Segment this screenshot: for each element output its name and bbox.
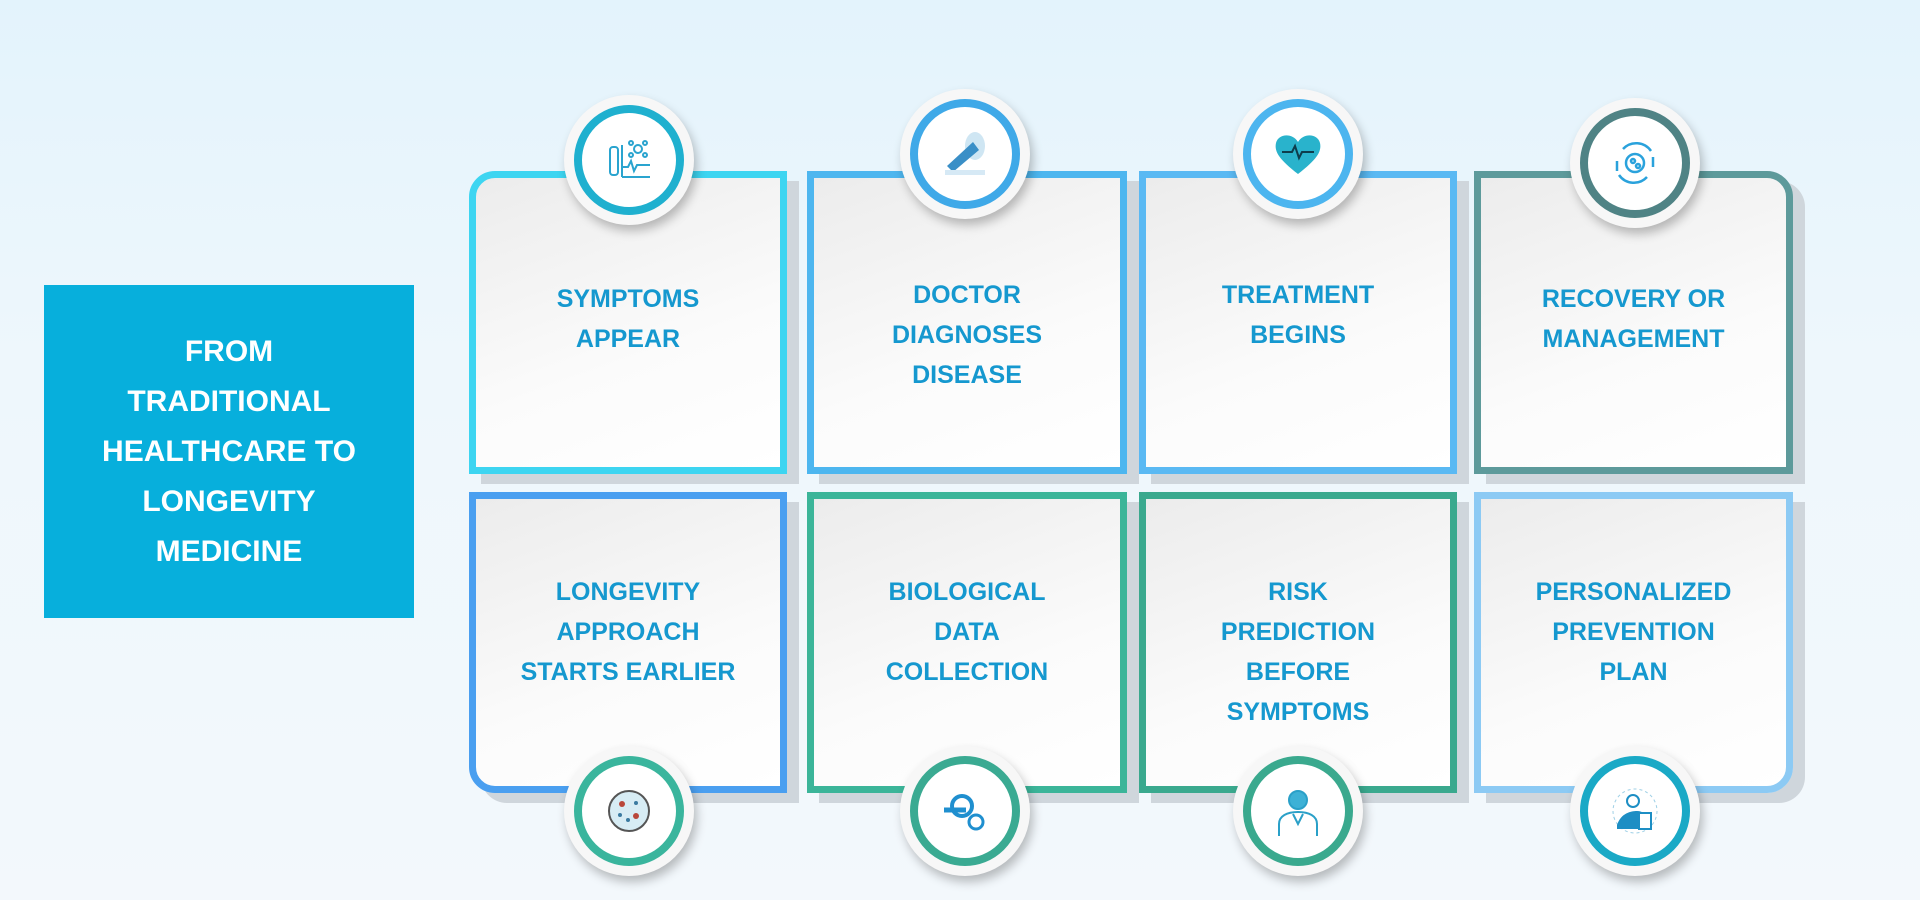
card: symptoms appear [469,171,787,474]
title box: MEDICINE [156,534,302,568]
card: doctor diagnoses disease: DIAGNOSES [892,321,1042,349]
title box: FROM [185,334,273,368]
card: recovery or management: MANAGEMENT [1543,325,1724,353]
card: doctor diagnoses disease: DOCTOR [913,281,1021,309]
card: recovery or management [1474,171,1793,474]
card: biological data collection: DATA [934,618,1000,646]
icon: doctor [1233,746,1363,876]
card: doctor diagnoses disease [807,171,1127,474]
card: longevity approach: LONGEVITY [556,578,700,606]
title box: TRADITIONAL [127,384,331,418]
card: biological data collection: COLLECTION [886,658,1048,686]
icon: recovery cycle [1570,98,1700,228]
card: personalized prevention plan: PREVENTION [1552,618,1715,646]
card: treatment begins: BEGINS [1250,321,1346,349]
card: personalized prevention plan: PLAN [1599,658,1668,686]
card: risk prediction: PREDICTION [1221,618,1375,646]
card: symptoms appear: APPEAR [576,325,680,353]
icon: gears data [900,746,1030,876]
card: personalized prevention plan [1474,492,1793,793]
card: biological data collection [807,492,1127,793]
card: risk prediction: RISK [1268,578,1328,606]
icon: lab test [564,95,694,225]
card: doctor diagnoses disease: DISEASE [912,361,1022,389]
card: longevity approach [469,492,787,793]
card: longevity approach: APPROACH [556,618,700,646]
card: treatment begins: TREATMENT [1222,281,1374,309]
icon: MRI scanner [900,89,1030,219]
icon: petri dish [564,746,694,876]
icon: heart [1233,89,1363,219]
title box: HEALTHCARE TO [102,434,356,468]
card: risk prediction [1139,492,1457,793]
icon: personalized plan [1570,746,1700,876]
card: risk prediction: SYMPTOMS [1227,698,1369,726]
card: personalized prevention plan: PERSONALIZED [1536,578,1731,606]
card: recovery or management: RECOVERY OR [1542,285,1725,313]
card: risk prediction: BEFORE [1246,658,1350,686]
title box [44,285,414,618]
card: symptoms appear: SYMPTOMS [557,285,699,313]
card: longevity approach: STARTS EARLIER [521,658,735,686]
card: treatment begins [1139,171,1457,474]
card: biological data collection: BIOLOGICAL [889,578,1045,606]
title box: LONGEVITY [142,484,316,518]
